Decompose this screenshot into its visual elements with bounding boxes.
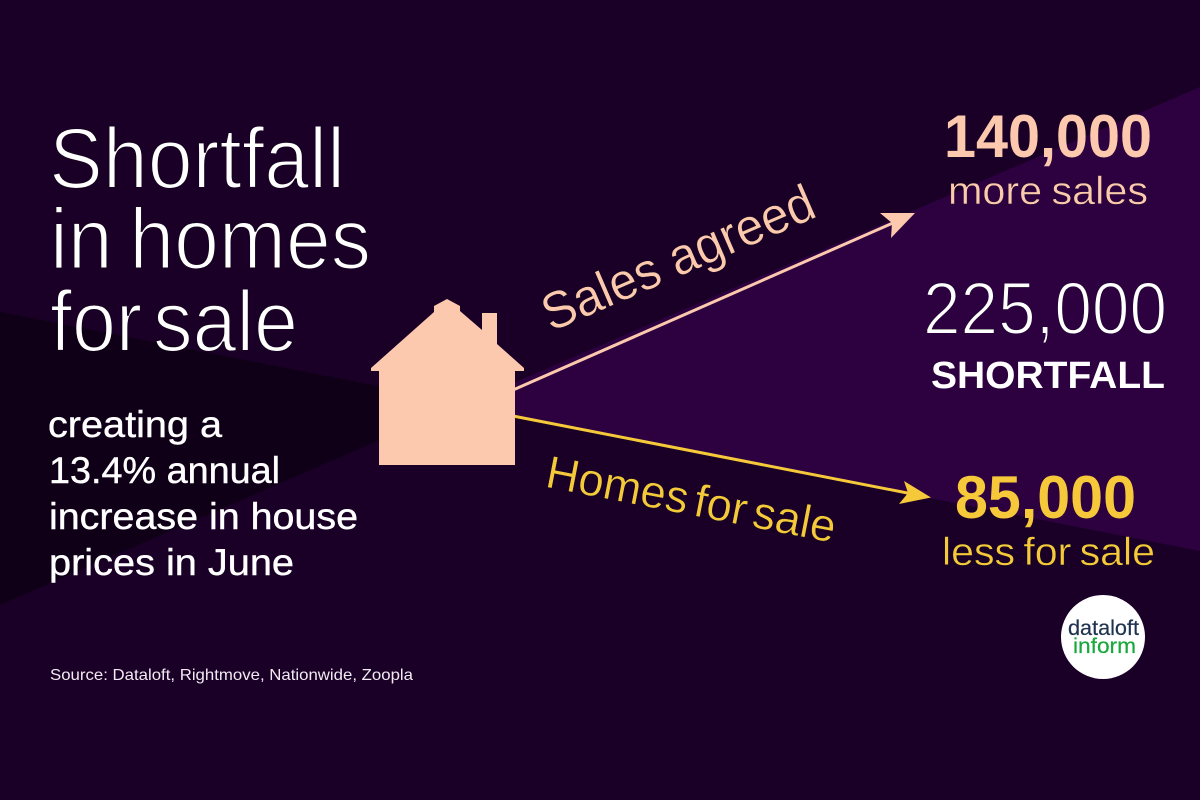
logo: dataloft inform: inform <box>1073 635 1136 658</box>
title <box>49 111 371 370</box>
stat: more sales <box>944 103 1152 213</box>
stat: less for sale <box>942 464 1155 574</box>
subtitle text block: prices in June <box>49 542 294 583</box>
title: in homes <box>50 192 371 288</box>
subtitle text block <box>48 404 358 583</box>
stat: more sales: more sales <box>948 170 1148 213</box>
stat: shortfall <box>923 267 1167 397</box>
arrow label: sales agreed: Sales agreed <box>533 174 824 343</box>
stat: more sales: 140,000 <box>944 103 1152 170</box>
arrow: homes for sale <box>513 416 931 504</box>
stat: shortfall: SHORTFALL <box>931 355 1165 397</box>
title: for sale <box>50 274 298 370</box>
logo: dataloft inform <box>1061 595 1145 679</box>
stat: less for sale: less for sale <box>942 531 1155 574</box>
title: Shortfall <box>49 111 345 207</box>
arrow: sales agreed <box>513 213 915 390</box>
logo: dataloft inform: dataloft <box>1068 617 1139 640</box>
icon: house <box>371 299 524 465</box>
source note: Source: Dataloft, Rightmove, Nationwide, Zoopla <box>50 667 413 684</box>
subtitle text block: creating a <box>48 404 222 445</box>
stat: less for sale: 85,000 <box>955 464 1136 531</box>
subtitle text block: 13.4% annual <box>49 450 280 491</box>
subtitle text block: increase in house <box>49 496 358 537</box>
stat: shortfall: 225,000 <box>923 267 1167 350</box>
arrow label: homes for sale: Homes for sale <box>542 445 841 553</box>
